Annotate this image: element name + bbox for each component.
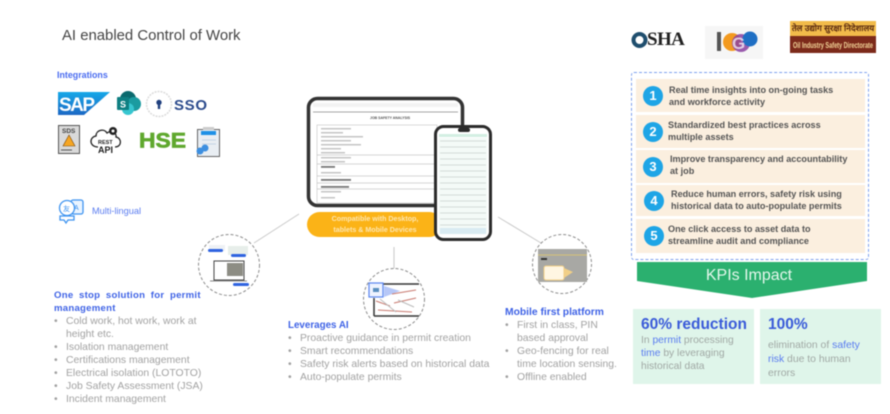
icon: multi-lingual: 友 bbox=[63, 204, 70, 214]
callout circle: AI screenshot bbox=[362, 268, 426, 331]
KPI text: historical data bbox=[641, 361, 705, 372]
icon: SDS document bbox=[58, 126, 80, 154]
text 1: Real time insights into on-going tasks bbox=[669, 85, 833, 95]
pill text: tablets & Mobile Devices bbox=[333, 226, 417, 234]
mobile bullet list: Offline enabled bbox=[517, 372, 587, 383]
bullet list: • bbox=[54, 394, 58, 405]
benefit 3 bbox=[636, 150, 865, 183]
callout circle: mobile platform screenshot bbox=[531, 234, 593, 295]
icon: SharePoint: S bbox=[120, 100, 126, 110]
number 5 bbox=[644, 226, 664, 246]
AI bullet list: Auto-populate permits bbox=[300, 372, 402, 383]
KPI text: time by leveraging bbox=[641, 348, 725, 359]
KPIs Impact banner bbox=[636, 261, 868, 299]
AI bullet list: • bbox=[288, 372, 292, 383]
text 3: Improve transparency and accountability bbox=[670, 154, 847, 164]
icon: multi-lingual bbox=[58, 198, 84, 224]
icon: SDS document: SDS bbox=[62, 128, 76, 135]
integrations logos bbox=[57, 90, 221, 158]
text 5 bbox=[668, 224, 811, 247]
permit heading: One stop solution for permit bbox=[54, 290, 201, 301]
number 1 bbox=[643, 86, 663, 106]
icon: SharePoint bbox=[117, 91, 141, 115]
KPI text bbox=[768, 340, 860, 379]
AI bullet list: Proactive guidance in permit creation bbox=[300, 333, 471, 344]
AI bullet list bbox=[288, 333, 490, 383]
tablet mockup bbox=[306, 96, 466, 208]
KPI text: errors bbox=[768, 368, 795, 379]
bullet list: Incident management bbox=[66, 394, 166, 405]
mobile bullet list: • bbox=[505, 372, 509, 383]
AI bullet list: Smart recommendations bbox=[300, 346, 413, 357]
bullet list: Certifications management bbox=[66, 355, 190, 366]
text 2 bbox=[668, 120, 821, 143]
icon: multi-lingual: A bbox=[74, 205, 79, 212]
pill text: Compatible with Desktop, bbox=[332, 215, 418, 223]
icon: HSE: HSE bbox=[139, 130, 186, 152]
icon: clipboard bbox=[196, 127, 220, 156]
mobile heading: Mobile first platform bbox=[505, 307, 604, 318]
mobile bullet list bbox=[505, 320, 617, 383]
bullet list: Isolation management bbox=[66, 342, 168, 353]
OSHA mark bbox=[630, 31, 648, 49]
text 3: at job bbox=[670, 166, 694, 176]
bullet list: • bbox=[54, 355, 58, 366]
icon: SSO: SSO bbox=[174, 97, 207, 114]
banner label: KPIs Impact bbox=[706, 267, 792, 284]
permit heading bbox=[54, 290, 201, 314]
banner arrow bbox=[636, 261, 868, 299]
compatibility pill bbox=[307, 212, 442, 237]
text 4: Reduce human errors, safety risk using bbox=[671, 189, 842, 199]
IGP mark: G bbox=[732, 34, 745, 53]
benefit 5 bbox=[636, 219, 865, 253]
AI bullet list: Safety risk alerts based on historical data bbox=[300, 359, 489, 370]
text 4 bbox=[670, 189, 842, 212]
text 3 bbox=[670, 154, 848, 177]
icon: REST API: API bbox=[98, 145, 113, 155]
benefit 1 bbox=[636, 79, 865, 112]
icon: SAP bbox=[58, 92, 110, 116]
bullet list: Job Safety Assessment (JSA) bbox=[66, 381, 203, 392]
benefit 2 bbox=[636, 115, 865, 148]
bullet list: • bbox=[54, 342, 58, 353]
mobile bullet list: based approval bbox=[517, 333, 588, 344]
AI bullet list: • bbox=[288, 333, 292, 344]
panel: permit management bbox=[54, 290, 203, 405]
bullet list: Electrical isolation (LOTOTO) bbox=[66, 368, 201, 379]
KPI value: 100% bbox=[768, 316, 808, 333]
KPI value: 60% reduction bbox=[641, 316, 747, 333]
Hindi line: तेल उद्योग सुरक्षा निदेशालय bbox=[792, 23, 874, 33]
pill text bbox=[331, 215, 419, 234]
panel: benefits bbox=[631, 72, 869, 260]
KPI text: elimination of safety bbox=[768, 340, 860, 351]
panel: leverages AI bbox=[288, 320, 490, 383]
text 2: multiple assets bbox=[668, 132, 734, 142]
logo: OSHA bbox=[630, 29, 686, 50]
mobile bullet list: First in class, PIN bbox=[517, 320, 598, 331]
KPI text bbox=[640, 335, 734, 372]
number 5: 5 bbox=[650, 228, 658, 243]
logo: Oil Industry Safety Directorate bbox=[790, 21, 876, 53]
number 2: 2 bbox=[649, 124, 657, 139]
callout circle: permit management screenshot bbox=[197, 234, 261, 297]
permit heading: management bbox=[54, 303, 116, 314]
benefit 4 bbox=[636, 185, 865, 216]
mobile bullet list: Geo-fencing for real bbox=[517, 346, 609, 357]
icon: SAP: SAP bbox=[59, 95, 95, 116]
number 1: 1 bbox=[649, 88, 657, 103]
bullet list: Cold work, hot work, work at bbox=[66, 316, 197, 327]
mobile bullet list: time location sensing. bbox=[517, 359, 617, 370]
OSHA word: SHA bbox=[647, 29, 684, 50]
text 1 bbox=[668, 85, 834, 108]
bullet list: • bbox=[54, 368, 58, 379]
title: AI enabled Control of Work bbox=[62, 28, 241, 44]
text 1: and workforce activity bbox=[669, 96, 765, 106]
AI bullet list: • bbox=[288, 359, 292, 370]
number 2 bbox=[643, 122, 663, 142]
mobile bullet list: • bbox=[505, 346, 509, 357]
IGP mark bbox=[716, 30, 758, 53]
number 4: 4 bbox=[650, 193, 658, 208]
panel: mobile first platform bbox=[504, 306, 617, 383]
icon: REST API bbox=[91, 127, 120, 155]
phone mockup bbox=[433, 124, 493, 242]
English band bbox=[790, 36, 876, 53]
mobile bullet list: • bbox=[505, 320, 509, 331]
text 5: streamline audit and compliance bbox=[668, 236, 809, 246]
AI heading: Leverages AI bbox=[288, 320, 349, 331]
integrations heading: Integrations bbox=[57, 70, 108, 80]
text 4: historical data to auto-populate permits bbox=[671, 200, 842, 210]
bullet list: • bbox=[54, 381, 58, 392]
KPI text: risk due to human bbox=[768, 354, 851, 365]
number 3: 3 bbox=[649, 159, 657, 174]
tablet mockup: JOB SAFETY ANALYSIS bbox=[370, 116, 411, 120]
KPI card: 60% reduction bbox=[633, 309, 754, 384]
number 4 bbox=[644, 191, 664, 211]
KPI text: In permit processing bbox=[641, 335, 734, 346]
AI bullet list: • bbox=[288, 346, 292, 357]
icon: REST API: REST bbox=[98, 140, 113, 146]
bullet list: height etc. bbox=[66, 329, 114, 340]
number 3 bbox=[643, 157, 663, 177]
text 5: One click access to asset data to bbox=[668, 224, 811, 234]
bullet list: • bbox=[54, 316, 58, 327]
text 2: Standardized best practices across bbox=[668, 120, 821, 130]
KPI card: 100% bbox=[760, 309, 881, 384]
icon: SSO bbox=[146, 92, 207, 116]
multi-lingual label: Multi-lingual bbox=[92, 206, 141, 216]
logo: IGP bbox=[705, 26, 763, 59]
bullet list bbox=[54, 316, 203, 405]
